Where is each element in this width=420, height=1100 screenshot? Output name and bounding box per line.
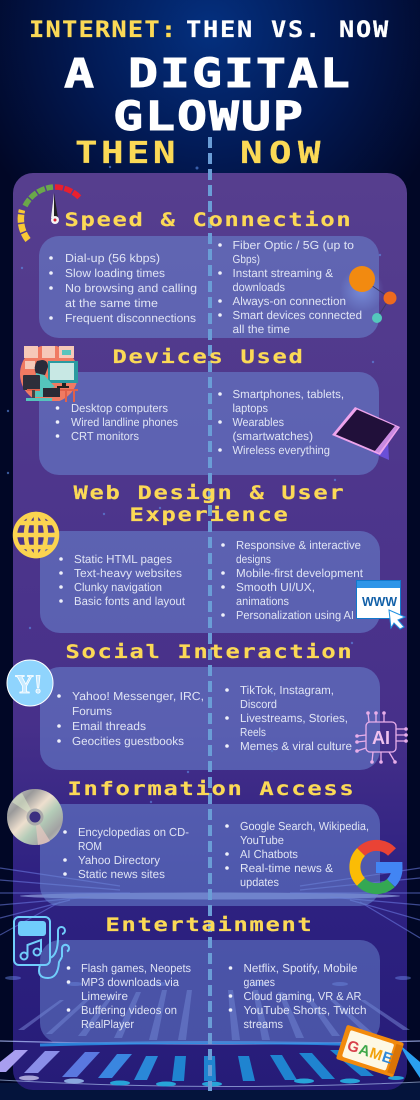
now list: web design: designs: [236, 553, 271, 566]
now list: information: Google Search, Wikipedia,: [240, 820, 369, 833]
then list: information: Yahoo Directory: [78, 854, 160, 867]
icon: game cartridge: [336, 1025, 404, 1077]
now list: social: TikTok, Instagram,: [240, 684, 334, 697]
panel: main purple container: [13, 173, 407, 1090]
now list: entertainment: Cloud gaming, VR & AR: [244, 990, 362, 1003]
now list: entertainment: games: [244, 976, 275, 989]
then list: web design: Text-heavy websites: [74, 567, 182, 580]
card: social interaction: [40, 667, 380, 770]
now list: entertainment: streams: [244, 1018, 283, 1031]
icon: speedometer gauge: [21, 187, 80, 240]
then list: social: Yahoo! Messenger, IRC,: [72, 690, 204, 703]
then list: speed: No browsing and calling: [65, 282, 197, 295]
then list: web design: Static HTML pages: [74, 553, 172, 566]
now list: speed: downloads: [232, 281, 285, 294]
now list: information: updates: [240, 876, 279, 889]
then list: web design: Clunky navigation: [74, 581, 162, 594]
now list: devices: Wireless everything: [232, 444, 330, 457]
then list: devices: Wired landline phones: [71, 416, 178, 429]
then list: speed: at the same time: [65, 297, 158, 310]
heading: web design and user experience: [74, 482, 345, 526]
heading: entertainment: Entertainment: [106, 914, 313, 936]
icon: www browser window with cursor: [356, 580, 405, 629]
then list: information: ROM: [78, 840, 102, 853]
then list: social: Email threads: [72, 720, 146, 733]
now list: devices: laptops: [232, 402, 268, 415]
now list: social: Livestreams, Stories,: [240, 712, 348, 725]
icon: game cartridge: GAME: [345, 1037, 395, 1068]
then list: speed: [49, 252, 197, 325]
column heading: now: NOW: [240, 136, 327, 171]
now list: speed: all the time: [232, 323, 290, 336]
icon: yahoo logo: Y!: [15, 670, 42, 699]
then list: devices: Desktop computers: [71, 402, 168, 415]
then list: speed: Slow loading times: [65, 267, 165, 280]
heading: A digital glowup: [64, 50, 352, 140]
now list: speed: Instant streaming &: [232, 267, 333, 280]
then list: web design: Basic fonts and layout: [74, 595, 186, 608]
then list: social: Forums: [72, 705, 112, 718]
now list: information: [225, 820, 369, 889]
now list: social: Reels: [240, 726, 266, 739]
then list: devices: [56, 402, 178, 443]
icon: yellow globe: [14, 513, 58, 557]
icon: folding tablet: [332, 407, 400, 460]
column heading: then: THEN: [75, 136, 179, 171]
then list: entertainment: Buffering videos on: [81, 1004, 177, 1017]
then list: information: Static news sites: [78, 868, 165, 881]
now list: information: AI Chatbots: [240, 848, 298, 861]
card: information access: [40, 804, 380, 906]
background: digital floor with light streaks: [0, 868, 420, 1087]
heading: information access: Information Access: [68, 778, 355, 800]
card: entertainment: [40, 940, 380, 1043]
now list: information: Real-time news &: [240, 862, 333, 875]
then list: entertainment: Limewire: [81, 990, 128, 1003]
then list: speed: Frequent disconnections: [65, 312, 196, 325]
then list: speed: Dial-up (56 kbps): [65, 252, 160, 265]
icon: Google G logo: [355, 845, 397, 889]
now list: devices: Wearables: [232, 416, 284, 429]
card: web design: [40, 531, 380, 633]
now list: web design: Smooth UI/UX,: [236, 581, 315, 594]
then list: entertainment: RealPlayer: [81, 1018, 134, 1031]
then list: entertainment: Flash games, Neopets: [81, 962, 191, 975]
now list: web design: animations: [236, 595, 289, 608]
decorative stars: [7, 166, 381, 803]
title: Internet then vs now: INTERNET:: [29, 17, 177, 43]
icon: network nodes: [340, 266, 396, 323]
icon: person at desktop computer: [20, 345, 78, 403]
now list: web design: [221, 539, 364, 622]
heading: devices used: Devices Used: [112, 346, 304, 368]
now list: social: Memes & viral culture: [240, 740, 352, 753]
heading: speed and connection: Speed & Connection: [64, 209, 352, 231]
now list: entertainment: Netflix, Spotify, Mobile: [244, 962, 358, 975]
card: devices used: [39, 372, 379, 475]
now list: speed: Smart devices connected: [232, 309, 362, 322]
now list: devices: Smartphones, tablets,: [232, 388, 344, 401]
now list: social: [225, 684, 352, 753]
heading: A digital glowup: GLOWUP: [113, 93, 305, 140]
then list: web design: [59, 553, 186, 608]
icon: yahoo logo: [7, 660, 53, 706]
now list: social: Discord: [240, 698, 277, 711]
then list: social: Geocities guestbooks: [72, 735, 184, 748]
now list: web design: Personalization using AI: [236, 609, 354, 622]
card: speed and connection: [39, 236, 379, 338]
heading: A digital glowup: A DIGITAL: [64, 50, 352, 97]
then list: entertainment: [67, 962, 191, 1031]
now list: web design: Responsive & interactive: [236, 539, 361, 552]
now list: speed: Gbps): [232, 253, 260, 266]
now list: devices: [218, 388, 344, 457]
then list: social: [57, 690, 204, 748]
icon: CD-ROM disc: [7, 789, 63, 845]
title: Internet then vs now: THEN VS. NOW: [186, 17, 390, 43]
heading: web design and user experience: Experience: [130, 504, 289, 526]
heading: social interaction: Social Interaction: [66, 641, 353, 663]
now list: devices: (smartwatches): [232, 430, 313, 443]
icon: AI chip: [355, 711, 408, 764]
heading: web design and user experience: Web Design & User: [74, 482, 345, 504]
icon: AI chip: AI: [372, 728, 390, 748]
now list: information: YouTube: [240, 834, 284, 847]
now list: entertainment: [229, 962, 366, 1031]
then list: information: [63, 826, 189, 881]
now list: entertainment: YouTube Shorts, Twitch: [244, 1004, 366, 1017]
title: Internet then vs now: [29, 17, 390, 43]
now list: speed: [218, 239, 362, 336]
now list: speed: Fiber Optic / 5G (up to: [232, 239, 354, 252]
then list: devices: CRT monitors: [71, 430, 139, 443]
icon: MP3 player with earphones: [14, 917, 69, 978]
then list: information: Encyclopedias on CD-: [78, 826, 189, 839]
now list: speed: Always-on connection: [232, 295, 346, 308]
now list: web design: Mobile-first development: [236, 567, 364, 580]
icon: www browser window with cursor: WWW: [362, 594, 398, 609]
then list: entertainment: MP3 downloads via: [81, 976, 180, 989]
divider: dashed center line: [208, 137, 212, 1091]
